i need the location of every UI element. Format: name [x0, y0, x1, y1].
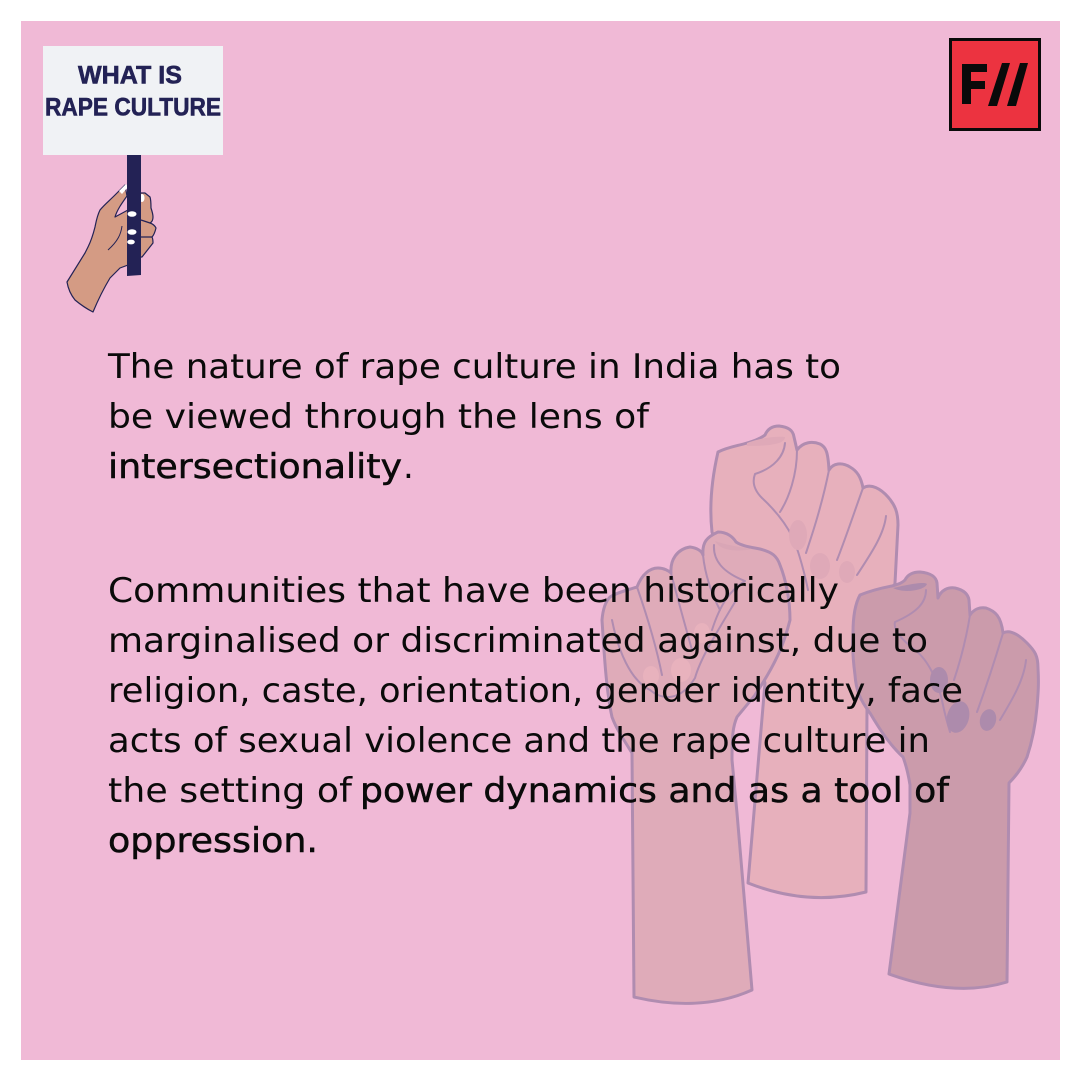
placard stick — [127, 155, 141, 276]
placard: what is rape culture — [43, 46, 223, 312]
text block: first paragraph: be viewed through the lens of — [108, 397, 650, 437]
text block: second paragraph: power dynamics and as a tool of — [360, 771, 950, 811]
text block: first paragraph: intersectionality — [108, 447, 402, 487]
text block: first paragraph: The nature of rape culture in India has to — [107, 347, 841, 387]
text block: second paragraph: Communities that have been historically — [108, 571, 839, 611]
text block: second paragraph: oppression. — [108, 821, 318, 861]
center fist — [711, 426, 898, 898]
text block: second paragraph: acts of sexual violence and the rape culture in — [108, 721, 930, 761]
text block: second paragraph: marginalised or discriminated against, due to — [108, 621, 928, 661]
placard heading: WHAT IS — [78, 62, 182, 90]
text block: second paragraph: the setting of — [108, 771, 353, 811]
placard heading: RAPE CULTURE — [45, 94, 221, 122]
placard board — [43, 46, 223, 155]
text block: first paragraph — [107, 347, 841, 487]
icon: hand holding stick — [67, 184, 156, 312]
left fist — [602, 532, 790, 1003]
illustration: raised fists — [602, 426, 1038, 1003]
right fist — [853, 572, 1038, 988]
placard heading — [45, 62, 221, 122]
text block: second paragraph: religion, caste, orientation, gender identity, face — [108, 671, 963, 711]
icon: finger nails and knuckle lines — [127, 211, 152, 244]
logo: F// — [950, 40, 1040, 130]
text block: first paragraph: . — [403, 447, 414, 487]
text block: second paragraph — [108, 571, 963, 861]
